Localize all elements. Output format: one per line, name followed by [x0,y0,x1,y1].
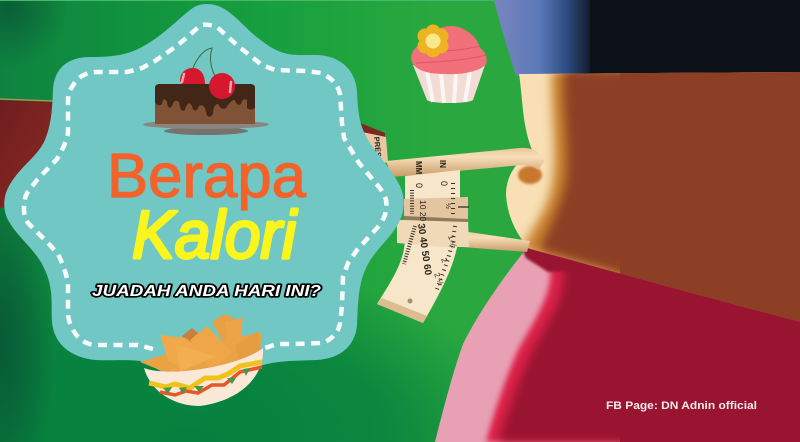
cupcake frosting [411,26,487,74]
caliper scale numbers: 30 40 50 60 [415,223,433,276]
waistband [494,0,800,78]
icon: bowl of nachos [140,314,263,406]
subtitle: JUADAH ANDA HARI INI? [92,283,322,300]
stitched dashed border [24,25,386,349]
icon: cupcake [411,24,487,103]
cake plate [164,127,248,135]
caliper scale numbers: 2 [439,257,449,264]
caliper scale numbers: 10 20 [418,200,428,222]
bare midriff [500,70,800,326]
caliper scale numbers: ½ [444,203,452,209]
title: Berapa: Berapa [107,142,307,211]
cupcake flower [418,24,448,58]
red shorts [430,244,800,442]
press tab [362,132,388,165]
icon: chocolate cake with cherries [143,48,269,135]
cherries [180,48,235,99]
caliper scale numbers [414,160,459,287]
nacho chips [140,314,262,378]
panel: scalloped teal badge [4,4,404,378]
photo: red sleeve arm at left [0,99,385,208]
cake icing [155,84,255,117]
caliper scale numbers: 2 ½ [432,271,446,287]
skinfold caliper [362,132,545,323]
bowl red band [160,367,262,395]
cake sponge [155,95,255,124]
bowl [144,348,263,406]
bowl green leaves [163,368,250,394]
caliper scale numbers: 1 ½ [446,234,459,250]
caliper scale numbers: IN [438,160,447,168]
cupcake liner [413,65,485,103]
slider [404,197,468,220]
credit: FB page: FB Page: DN Adnin official [606,400,757,412]
curved scale body [377,170,460,323]
caliper scale numbers: MM [414,161,423,175]
photo: torso [430,0,800,442]
caliper scale numbers: 0 [414,183,424,188]
bowl yellow band [149,362,262,388]
caliper scale numbers: 0 [439,181,449,186]
upper arm [386,148,545,177]
title: Kalori: Kalori [132,197,298,273]
press label: PRESS [372,136,384,163]
lower arm [462,231,530,252]
caliper tick marks [404,190,415,264]
